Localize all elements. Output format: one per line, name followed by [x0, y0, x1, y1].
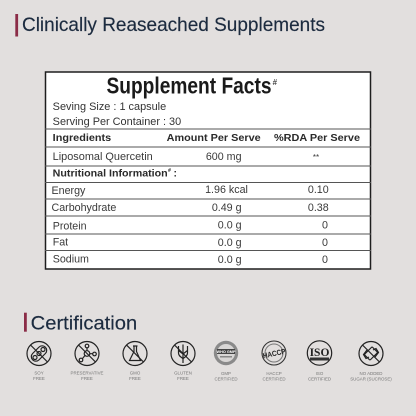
icon: iso certified	[307, 341, 332, 365]
row: fat	[53, 237, 328, 249]
row: fat: 0.0 g	[218, 237, 242, 249]
row: protein: 0	[322, 219, 328, 231]
label: preservative free: FREE	[81, 376, 93, 381]
label: haccp certified	[262, 371, 286, 381]
icon: iso certified: ISO	[310, 347, 329, 359]
label: haccp certified: HACCP	[266, 371, 282, 376]
row: fat: Fat	[53, 237, 68, 249]
label: haccp certified: CERTIFIED	[262, 376, 286, 381]
row: energy: Energy	[52, 185, 86, 197]
row: liposomal quercetin: 600 mg	[206, 151, 242, 163]
row: nutritional information heading: #	[168, 168, 171, 174]
heading: certification: Certification	[31, 313, 137, 334]
row: fat: 0	[322, 237, 328, 249]
row: protein: Protein	[53, 221, 87, 233]
row: sodium: 0	[322, 254, 328, 266]
icon: gluten free	[171, 342, 195, 366]
row: sodium: Sodium	[53, 254, 89, 266]
row: carbohydrate: Carbohydrate	[52, 202, 116, 214]
label: gluten free: GLUTEN	[174, 370, 192, 376]
row: liposomal quercetin: **	[313, 153, 319, 162]
label: no added sugar: NO ADDED	[360, 371, 382, 376]
label: iso certified	[308, 371, 331, 381]
label: no added sugar	[350, 371, 392, 381]
icon: gmp certified: WHO GMP	[217, 350, 236, 354]
heading: clinically researched supplements: Clinically Reaseached Supplements	[22, 14, 325, 36]
row: sodium	[53, 254, 328, 266]
label: gmo free	[129, 370, 141, 381]
row: carbohydrate: 0.38	[308, 202, 329, 214]
serving information: Serving Per Container : 30	[53, 116, 181, 128]
label: gmo free: FREE	[129, 376, 141, 381]
row: carbohydrate	[52, 202, 329, 214]
label: soy free: SOY	[34, 370, 44, 376]
label: soy free	[33, 370, 45, 381]
label: gmp certified: GMP	[221, 371, 231, 376]
label: iso certified: ISO	[316, 371, 324, 376]
table header row: Ingredients	[53, 133, 111, 144]
label: gmp certified: CERTIFIED	[214, 376, 238, 381]
icon: haccp certified	[262, 341, 286, 365]
label: no added sugar: SUGAR (SUCROSE)	[350, 376, 392, 381]
label: preservative free: PRESERVATIVE	[71, 370, 104, 376]
label: iso certified: CERTIFIED	[308, 376, 331, 381]
label: gmp certified	[214, 371, 238, 381]
icon: no added sugar	[359, 342, 383, 366]
icon: gmo free	[123, 342, 147, 366]
icon: preservative free	[75, 342, 99, 366]
row: carbohydrate: 0.49 g	[212, 202, 242, 214]
label: gluten free: FREE	[177, 376, 189, 381]
label: preservative free	[71, 370, 104, 381]
row: sodium: 0.0 g	[218, 254, 242, 266]
icon: gmp certified	[214, 341, 238, 365]
table title: Supplement Facts	[106, 72, 272, 98]
serving information	[53, 101, 181, 128]
row: energy: 1.96 kcal	[205, 184, 248, 196]
row: protein	[53, 219, 328, 233]
row: liposomal quercetin: Liposomal Quercetin	[53, 151, 153, 163]
label: gluten free	[174, 370, 192, 381]
table header row: Amount Per Serve	[167, 133, 261, 144]
row: energy: 0.10	[308, 184, 329, 196]
serving information: Seving Size : 1 capsule	[53, 101, 166, 113]
row: energy	[52, 184, 329, 197]
panel: supplement facts table	[45, 72, 371, 269]
row: nutritional information heading: :	[174, 168, 177, 180]
row: protein: 0.0 g	[218, 219, 242, 231]
icon: soy free	[27, 342, 51, 366]
label: soy free: FREE	[33, 376, 45, 381]
row: nutritional information heading: Nutritional Information	[53, 168, 168, 180]
table header row: %RDA Per Serve	[274, 133, 360, 144]
icon: haccp certified: HACCP	[262, 347, 286, 360]
row: liposomal quercetin	[53, 151, 319, 163]
label: gmo free: GMO	[130, 370, 141, 376]
table header row	[53, 133, 360, 144]
table title: #	[272, 78, 278, 87]
